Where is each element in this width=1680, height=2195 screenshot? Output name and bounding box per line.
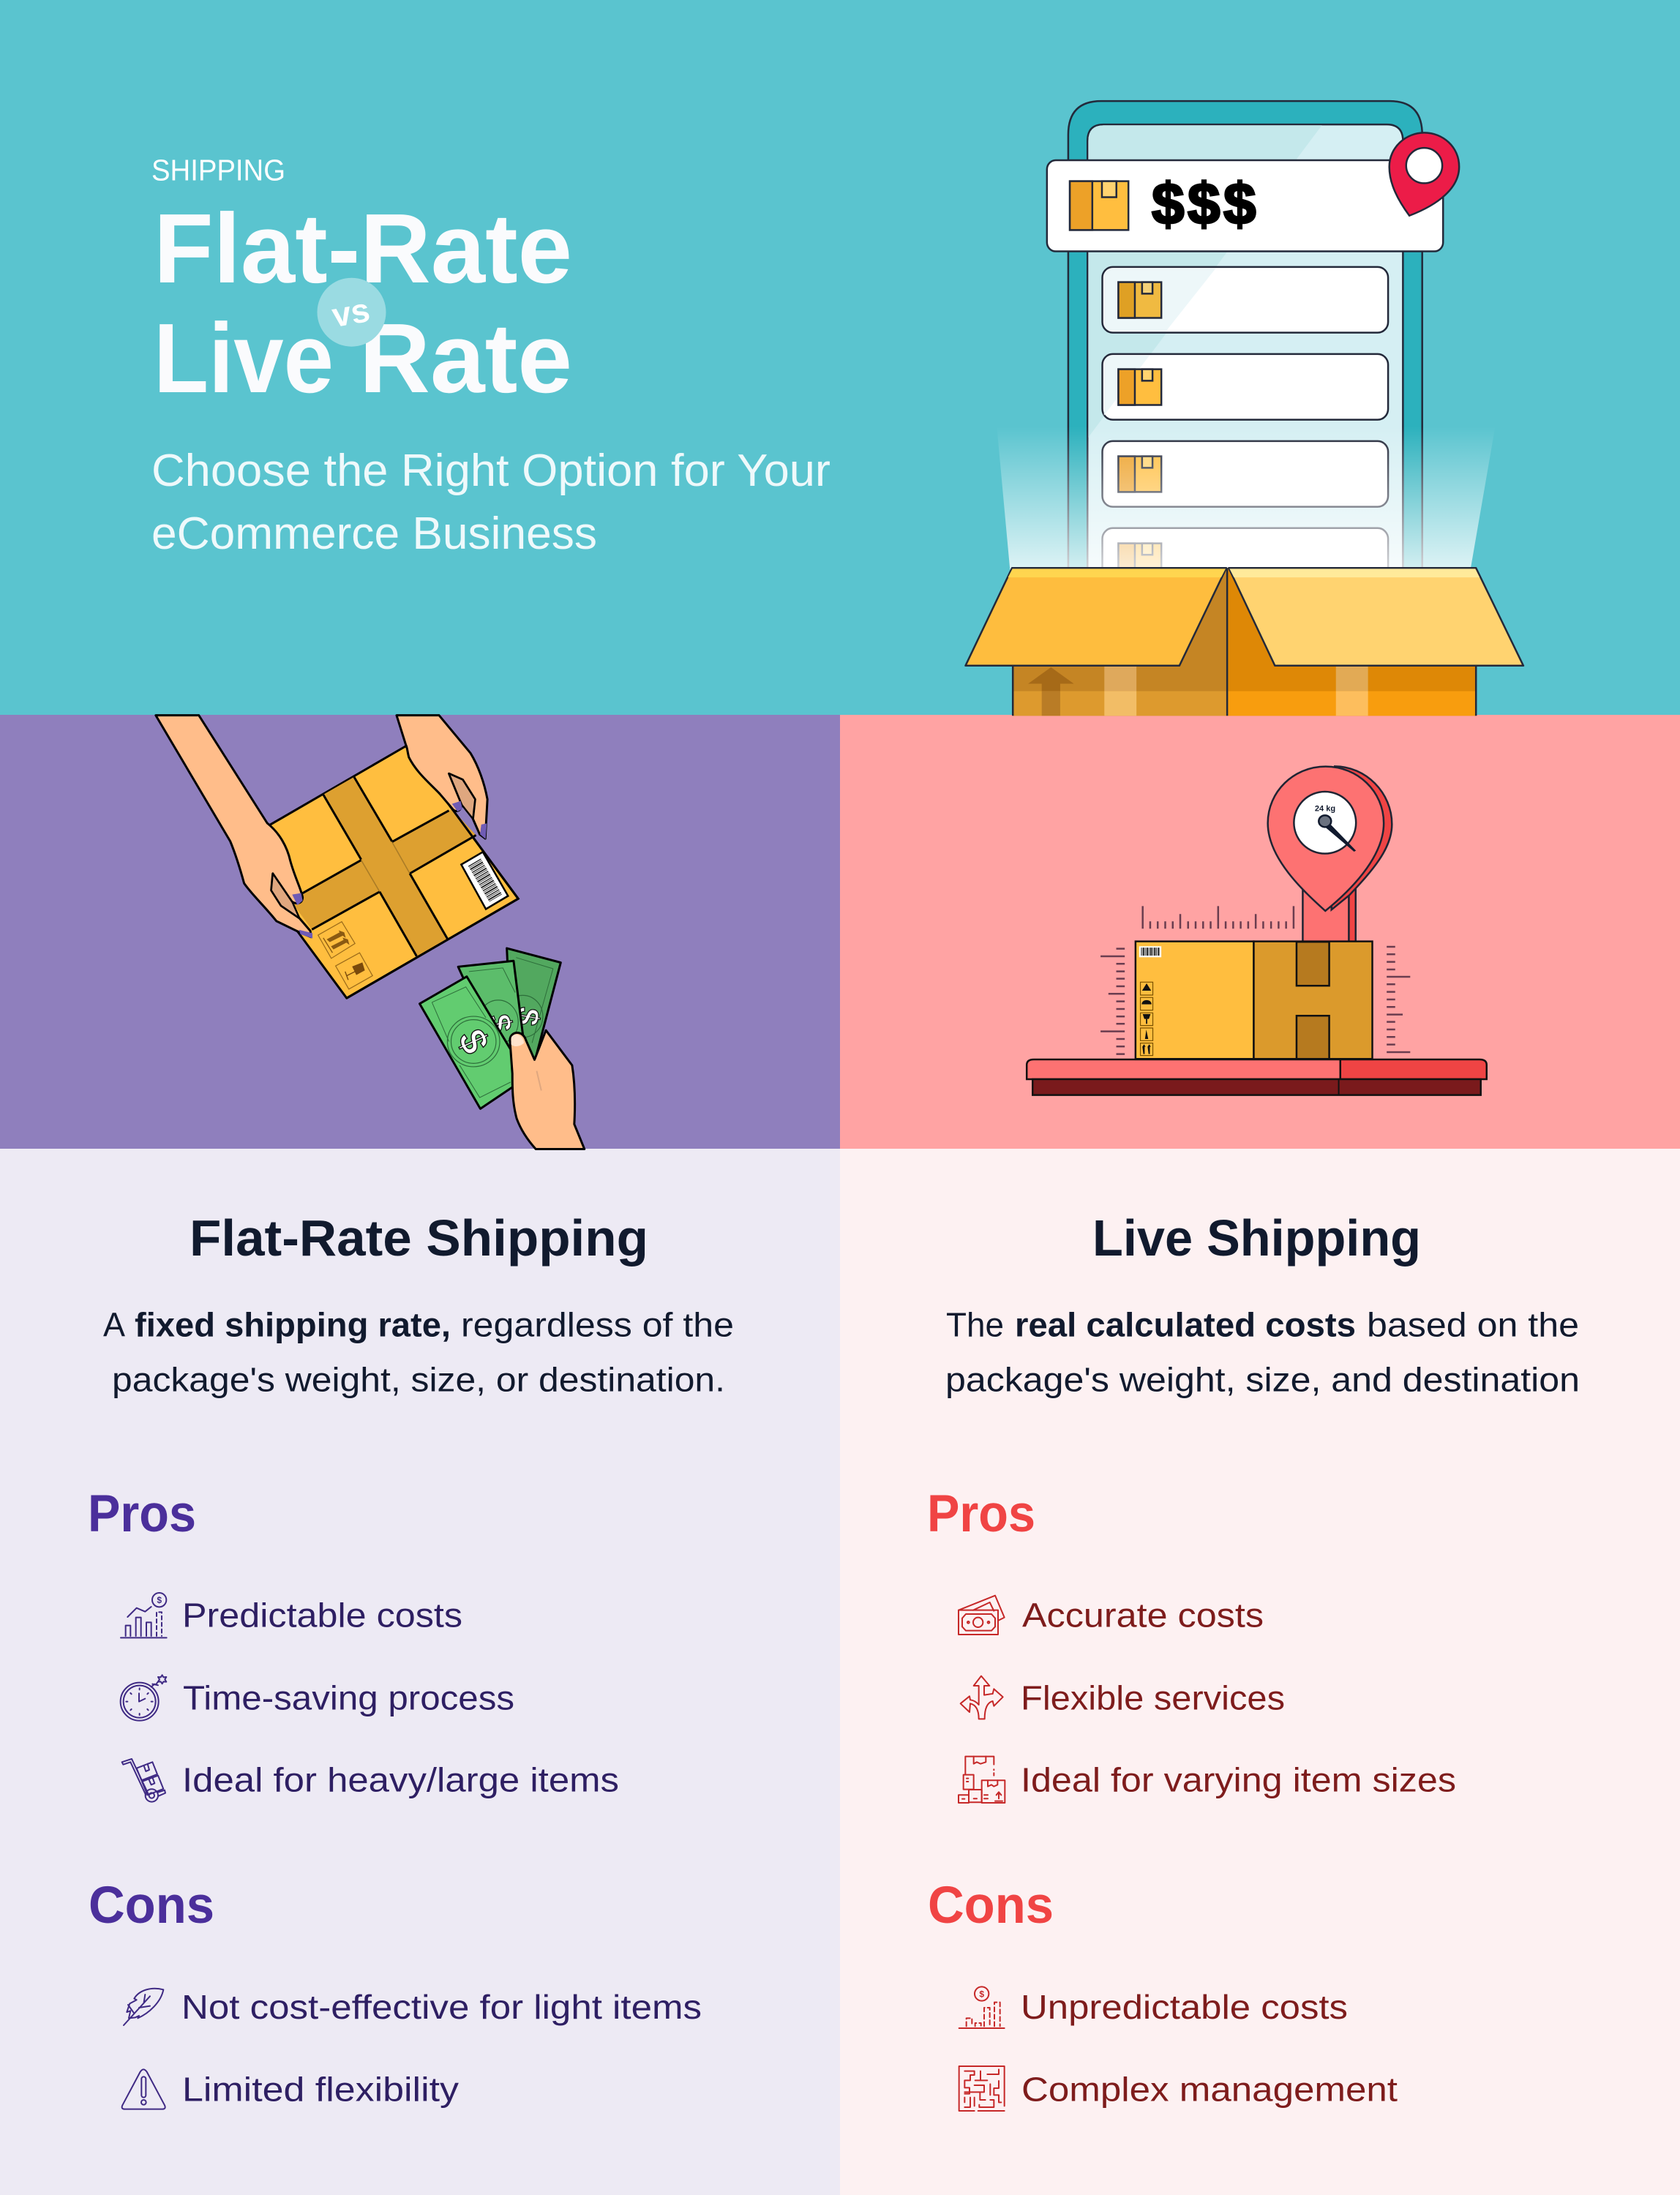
icon: cost chart: $: [157, 1595, 162, 1605]
list: live shipping pros: [959, 1596, 1456, 1803]
title: [154, 193, 572, 413]
dial: [1268, 766, 1392, 911]
platform: [1027, 1059, 1487, 1095]
definition: flat-rate: regardless of the: [461, 1306, 734, 1344]
cash: $: [480, 1012, 519, 1035]
list row 3: [1103, 441, 1388, 507]
definition: live shipping: [945, 1306, 1580, 1399]
icon: hand truck: [122, 1759, 165, 1802]
vs badge: vs: [329, 290, 372, 334]
list: flat-rate pros: [121, 1593, 619, 1802]
item: accurate costs: Accurate costs: [1022, 1596, 1264, 1635]
heading: live shipping pros: Pros: [927, 1485, 1035, 1543]
subtitle: Choose the Right Option for Your: [151, 446, 830, 496]
item: flexible services: Flexible services: [1021, 1679, 1285, 1717]
item: not cost-effective: Not cost-effective for light items: [181, 1988, 702, 2026]
heading: flat-rate pros: Pros: [88, 1485, 196, 1543]
illustration: hands, parcel and cash: [156, 716, 585, 1149]
definition: live shipping: real calculated costs: [1015, 1306, 1356, 1344]
definition: live shipping: The: [946, 1306, 1004, 1344]
item: unpredictable costs: Unpredictable costs: [1021, 1988, 1348, 2026]
icon: cost chart: [121, 1593, 167, 1637]
item: predictable costs: Predictable costs: [182, 1596, 462, 1635]
heading: Flat-Rate Shipping: Flat-Rate Shipping: [190, 1209, 648, 1267]
icon: rising cost towers: $: [979, 1989, 984, 1999]
left hand: [156, 716, 312, 939]
title: Flat-Rate: [154, 193, 572, 304]
panel: live shipping details background: [840, 1149, 1680, 2195]
cash: [420, 948, 560, 1108]
icon: three-way arrows: [961, 1676, 1003, 1719]
definition: flat-rate: fixed shipping rate,: [135, 1306, 451, 1344]
scale stem: [1302, 885, 1356, 942]
title: Live: [154, 303, 334, 413]
definition: live shipping: package's weight, size, and destination: [945, 1361, 1580, 1399]
list row 4: [1103, 528, 1388, 594]
subtitle: [151, 446, 830, 559]
item: limited flexibility: Limited flexibility: [182, 2071, 459, 2109]
panel: live shipping illustration background: [840, 715, 1680, 1149]
illustration: weighing scale: [1027, 766, 1487, 1095]
illustration: phone in open box: [965, 101, 1523, 716]
icon: warning: [122, 2069, 165, 2109]
item: ideal for heavy items: Ideal for heavy/large items: [182, 1760, 619, 1798]
panel: flat-rate illustration background: [0, 715, 840, 1149]
icon: feather: [124, 1989, 163, 2025]
list row 2: [1103, 354, 1388, 420]
light beam: [997, 427, 1496, 570]
definition: flat-rate: A: [103, 1306, 125, 1344]
item: ideal for varying sizes: Ideal for varying item sizes: [1021, 1760, 1456, 1798]
definition: live shipping: based on the: [1367, 1306, 1579, 1344]
hand holding cash: [510, 1030, 585, 1149]
list: flat-rate cons: [122, 1988, 702, 2109]
subtitle: eCommerce Business: [151, 509, 597, 559]
definition: flat-rate: [103, 1306, 734, 1399]
heading: flat-rate cons: Cons: [89, 1877, 214, 1935]
package on scale: [1136, 942, 1373, 1059]
screen glare: [1088, 125, 1322, 438]
item: complex management: Complex management: [1021, 2071, 1398, 2109]
eyebrow: SHIPPING: SHIPPING: [151, 154, 285, 187]
list: live shipping cons: [959, 1986, 1398, 2111]
parcel: [234, 746, 518, 998]
icon: assorted boxes: [959, 1757, 1005, 1803]
heading: live shipping cons: Cons: [928, 1877, 1054, 1935]
price text: $$$: [1152, 171, 1256, 236]
definition: flat-rate: package's weight, size, or destination.: [112, 1361, 725, 1399]
barcode label: [461, 852, 508, 909]
icon: maze: [959, 2066, 1005, 2111]
handling labels: [318, 922, 372, 989]
list row 1: [1103, 267, 1388, 333]
heading: Live Shipping: Live Shipping: [1092, 1209, 1421, 1267]
open box: [965, 568, 1523, 716]
icon: rising cost towers: [959, 1986, 1005, 2028]
icon: banknotes: [959, 1596, 1005, 1635]
rulers: [1100, 906, 1410, 1054]
phone body: [1068, 101, 1422, 570]
cash: $: [508, 1005, 547, 1029]
panel: flat-rate details background: [0, 1149, 840, 2195]
highlighted price bar: [1047, 160, 1443, 252]
dial reading: 24 kg: [1315, 805, 1335, 814]
icon: stopwatch: [121, 1675, 166, 1721]
item: time-saving process: Time-saving process: [183, 1679, 514, 1717]
title: Rate: [359, 303, 572, 413]
phone screen: [1087, 124, 1403, 570]
vs badge: [318, 278, 386, 347]
right hand: [397, 716, 487, 839]
panel: header background: [0, 0, 1680, 716]
location pin: [1390, 132, 1459, 216]
cash: $: [449, 1023, 497, 1060]
